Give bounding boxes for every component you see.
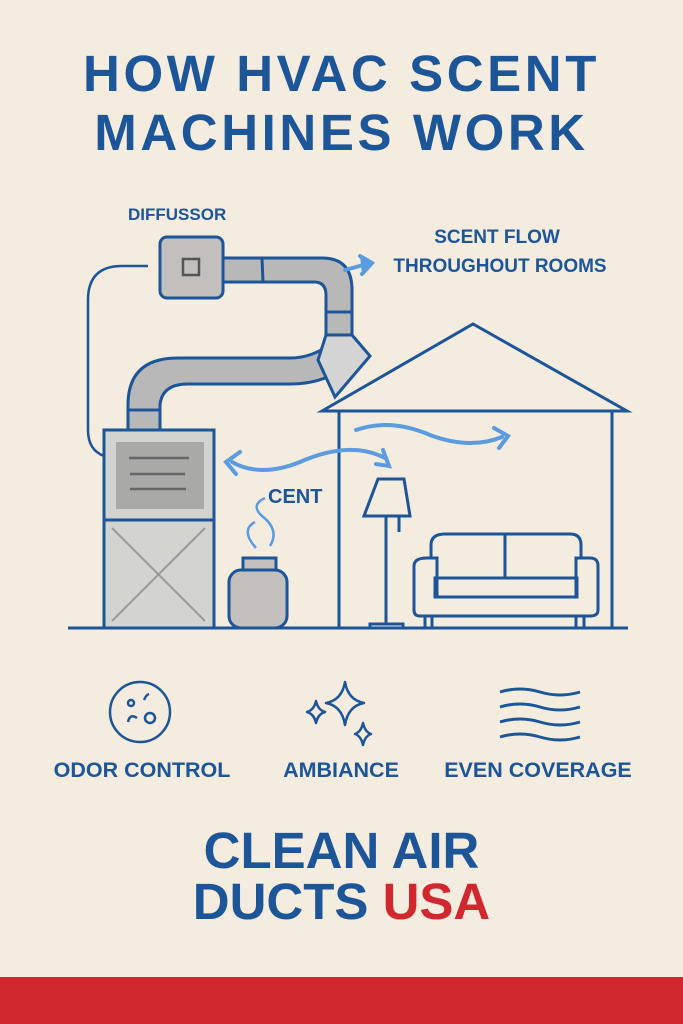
furnace [104, 430, 214, 628]
icon: ambiance [307, 682, 371, 745]
title: MACHINES WORK [94, 104, 589, 161]
house [322, 324, 627, 628]
label: scent flow: THROUGHOUT ROOMS [393, 256, 607, 277]
brand: DUCTS USA [193, 873, 490, 930]
icon: even coverage [500, 689, 580, 740]
benefit labels [54, 758, 632, 782]
scent jar [229, 498, 287, 628]
arrows: scent flow [226, 256, 508, 474]
benefit labels: ODOR CONTROL [54, 758, 230, 782]
diffuser box [160, 237, 223, 298]
red footer bar [0, 977, 683, 1024]
wire [88, 266, 148, 456]
label: scent flow: SCENT FLOW [434, 227, 560, 248]
title: HOW HVAC SCENT [83, 45, 600, 102]
duct [128, 258, 370, 432]
lamp [364, 479, 410, 628]
sofa [414, 534, 598, 628]
brand [193, 822, 490, 930]
benefit labels: AMBIANCE [283, 758, 399, 782]
brand: CLEAN AIR [204, 822, 479, 879]
label: scent flow [393, 227, 607, 277]
label: diffusor: DIFFUSSOR [128, 205, 226, 224]
benefit labels: EVEN COVERAGE [444, 758, 632, 782]
label: cent: CENT [268, 486, 322, 508]
ground [68, 626, 628, 630]
title [83, 45, 600, 161]
icon: odor control [110, 682, 170, 742]
